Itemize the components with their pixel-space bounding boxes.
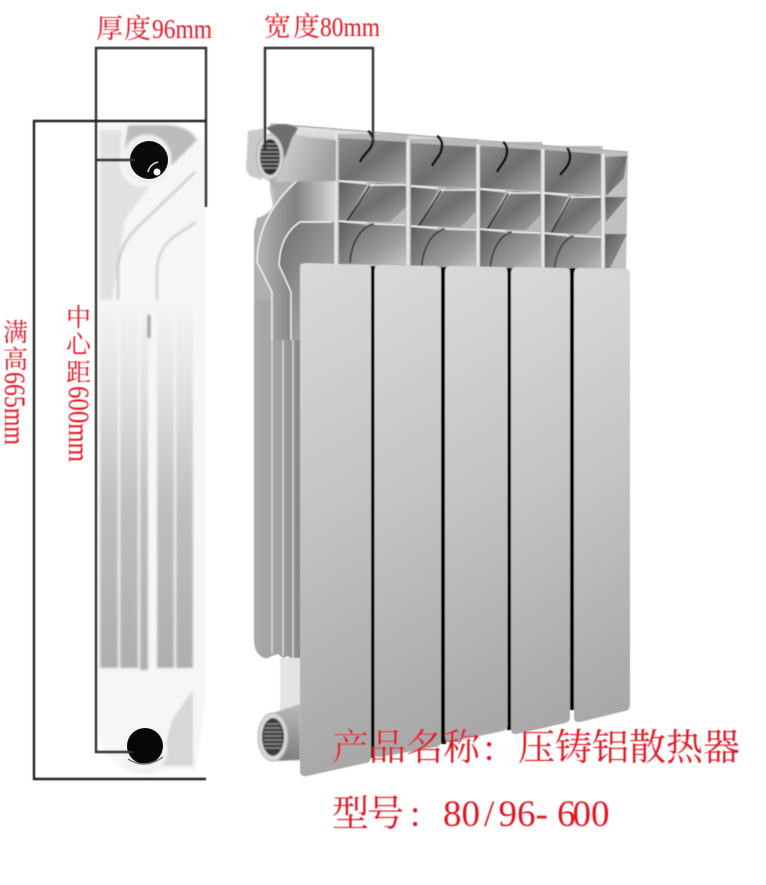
header and fin block xyxy=(254,123,628,340)
label: thickness 96mm: 厚度 xyxy=(96,14,151,44)
dimension lines: side view xyxy=(34,48,206,779)
label: total height 665mm xyxy=(0,319,31,445)
icon: top pipe opening xyxy=(130,141,168,179)
dimension lines: front view width xyxy=(265,48,373,150)
lower neck xyxy=(280,658,301,716)
label: total height 665mm: 满 xyxy=(3,319,28,347)
bottom threaded pipe inlet xyxy=(258,704,300,761)
label: width 80mm: 宽度 xyxy=(264,12,320,42)
label: thickness 96mm: 96mm xyxy=(152,14,212,44)
black gaps between panels xyxy=(371,266,575,758)
left neck with notch xyxy=(254,176,300,300)
product name: 压铸铝散热器 xyxy=(518,727,740,769)
label: total height 665mm: 高 xyxy=(3,346,28,374)
label: width 80mm: 80mm xyxy=(320,12,380,42)
side view curved highlights xyxy=(118,172,196,338)
rightmost fins xyxy=(605,156,627,268)
product name: : xyxy=(484,728,494,769)
label: centre distance 600mm xyxy=(62,304,95,462)
side view radiator xyxy=(99,124,205,775)
side view vertical strips xyxy=(100,300,193,670)
side view lower shading xyxy=(160,690,193,766)
panel 1 xyxy=(300,263,371,776)
label: centre distance 600mm: 中 xyxy=(66,304,91,332)
product name xyxy=(332,727,740,769)
label: centre distance 600mm: 心 xyxy=(66,331,92,359)
left side fins xyxy=(254,200,300,660)
icon: top pipe ring xyxy=(122,134,172,184)
model number: 型号 xyxy=(332,794,404,835)
top threaded pipe inlet xyxy=(246,124,336,182)
label: thickness 96mm xyxy=(96,14,212,44)
panel 5 xyxy=(574,268,630,722)
model number xyxy=(332,794,610,835)
panel 4 xyxy=(511,267,570,734)
model number: : xyxy=(410,794,420,835)
inner S-shaped band xyxy=(279,222,334,340)
panel 2 xyxy=(374,265,441,757)
side view upper left shading xyxy=(100,130,150,300)
header slits xyxy=(360,131,570,175)
label: width 80mm xyxy=(264,12,380,42)
side view top header shading xyxy=(124,125,197,165)
icon: bottom pipe ring xyxy=(122,727,168,773)
icon: bottom pipe opening xyxy=(127,728,163,764)
model number: 80/96-600 xyxy=(443,794,610,835)
outer S-shaped band xyxy=(257,180,334,340)
label: centre distance 600mm: 600mm xyxy=(62,386,95,462)
panel 3 xyxy=(445,266,508,742)
label: centre distance 600mm: 距 xyxy=(66,360,91,387)
product name: 产品名称 xyxy=(332,727,481,769)
